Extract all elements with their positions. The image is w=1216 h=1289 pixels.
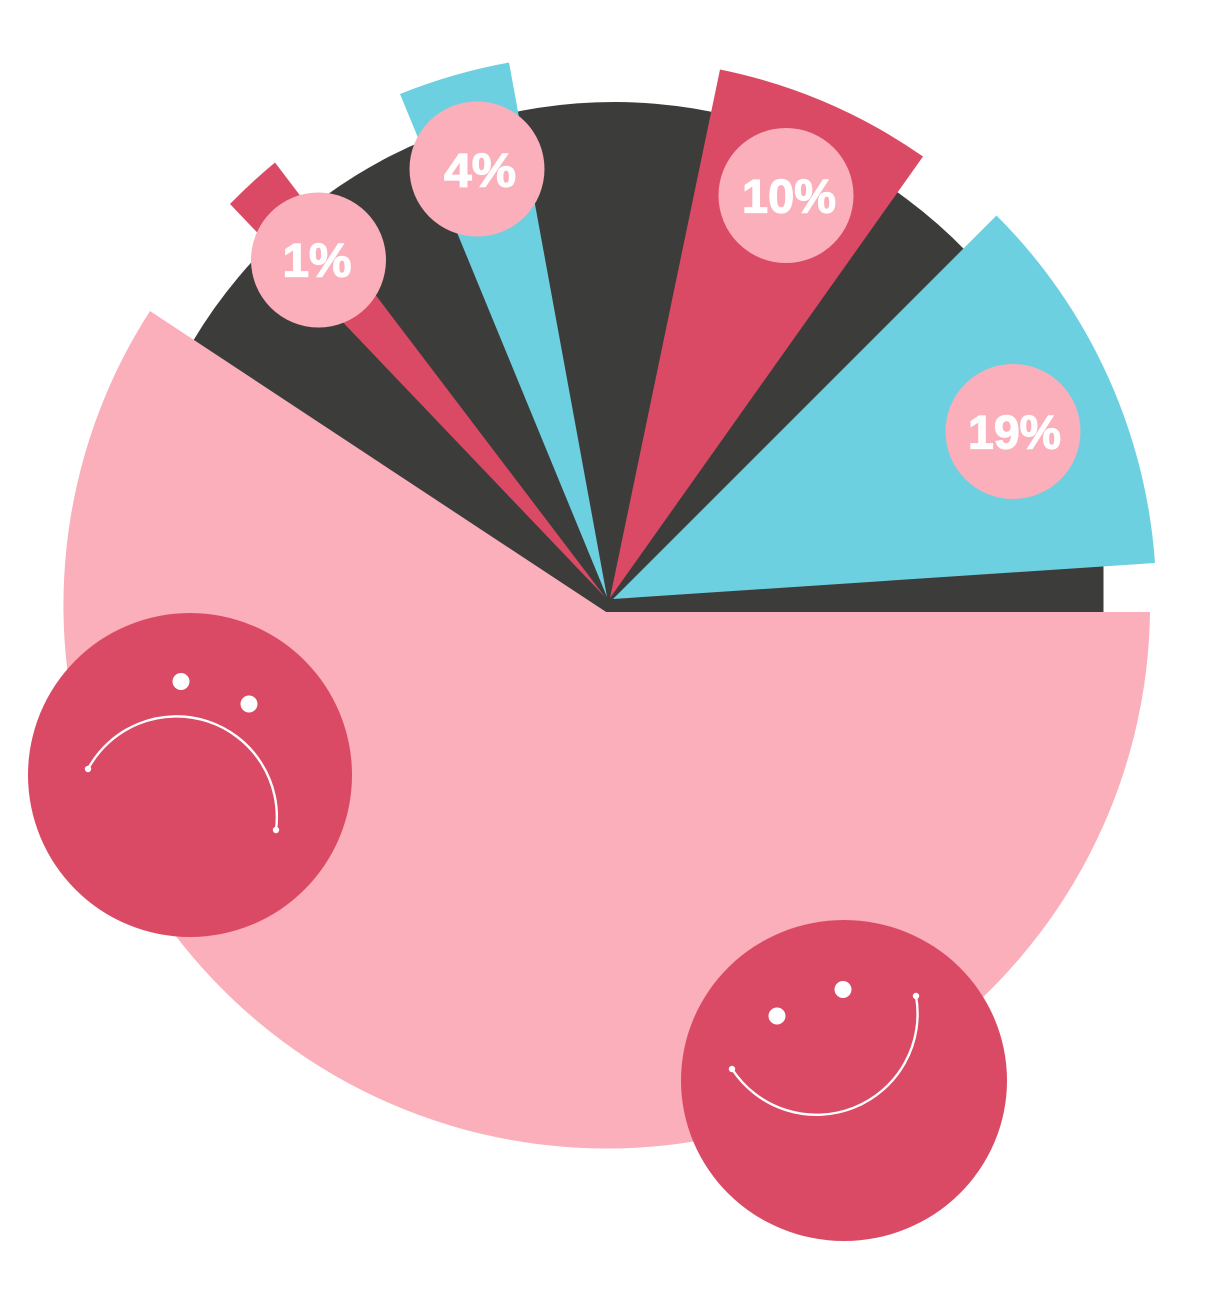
label: 1% bbox=[251, 192, 386, 328]
icon: sad face bbox=[28, 613, 352, 937]
label: 19% bbox=[946, 364, 1080, 499]
icon: happy face bbox=[681, 920, 1007, 1241]
dark pie background bbox=[193, 102, 1104, 612]
red slice 1% bbox=[230, 162, 605, 597]
red slice 10% bbox=[610, 70, 923, 598]
label: 19%: 19% bbox=[968, 406, 1061, 458]
large pink slice bbox=[63, 311, 1150, 1149]
blue slice 19% bbox=[613, 216, 1155, 599]
blue slice 4% bbox=[400, 62, 607, 597]
label: 4% bbox=[410, 102, 544, 236]
label: 10%: 10% bbox=[742, 170, 836, 222]
label: 1%: 1% bbox=[282, 234, 352, 286]
label: 10% bbox=[718, 128, 854, 263]
label: 4%: 4% bbox=[444, 144, 516, 196]
